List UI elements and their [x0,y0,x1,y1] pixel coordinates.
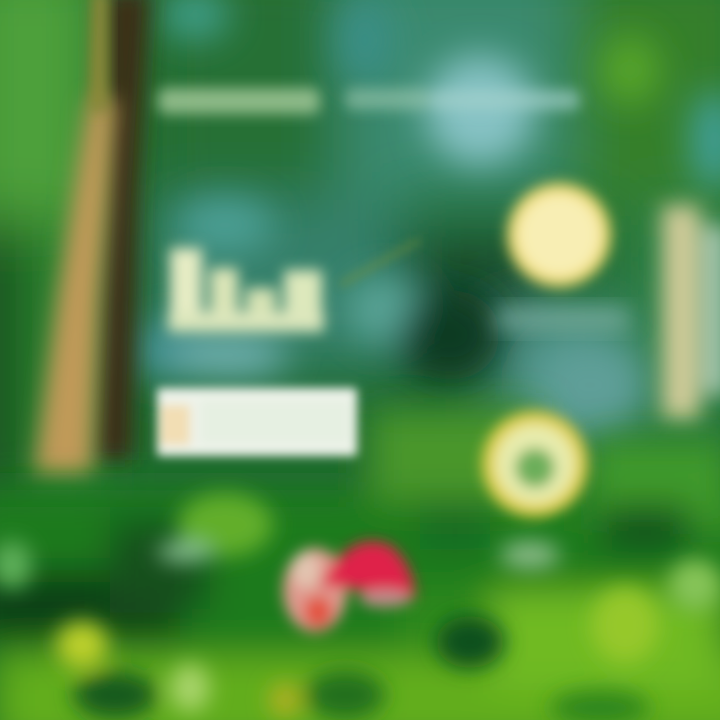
sky patches [130,0,720,430]
foreground foliage [0,410,720,720]
chart connector line [340,240,420,285]
heading (blurred title) [158,88,580,114]
icon: yellow circle with leaf [482,411,588,517]
icon: yellow circle [507,183,611,287]
left tree trunk [34,0,150,475]
callout strip under sun [495,308,630,330]
mushroom [283,541,415,632]
right tree trunk [662,205,720,420]
text panel [157,388,357,456]
bar chart [168,248,324,332]
background: forest canopy and sky [0,0,720,505]
